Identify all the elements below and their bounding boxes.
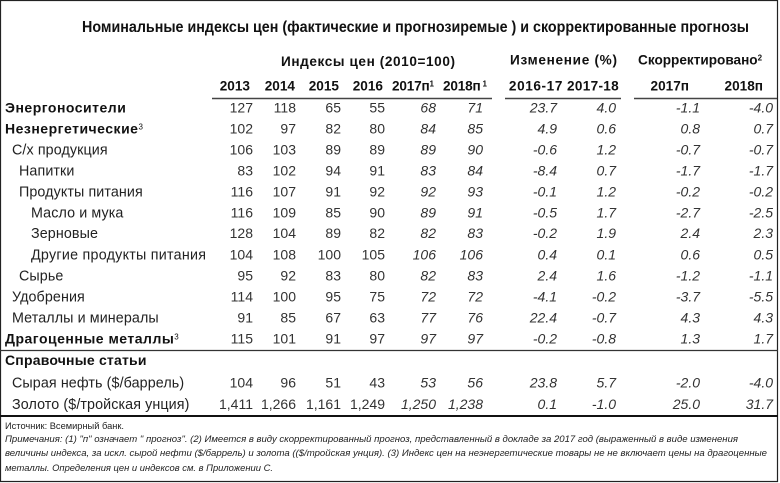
column group headers — [281, 52, 763, 69]
index values 2013-2016: 118 — [274, 99, 296, 115]
forecast and change values: 68 — [420, 99, 436, 115]
column year headers: 2017п — [392, 78, 429, 93]
forecast and change values: -2.0 — [676, 374, 700, 390]
column year headers: 2018п — [443, 78, 480, 93]
forecast and change values: 1.7 — [597, 204, 617, 220]
forecast and change values — [401, 99, 774, 412]
index values 2013-2016: 104 — [230, 246, 253, 262]
row labels — [5, 99, 206, 413]
forecast and change values: 71 — [467, 99, 483, 115]
forecast and change values: 4.0 — [597, 99, 616, 115]
index values 2013-2016: 91 — [237, 309, 253, 325]
forecast and change values: -0.7 — [592, 309, 617, 325]
row labels: Золото ($/тройская унция) — [12, 397, 189, 413]
column year headers: 2016 — [353, 78, 383, 93]
index values 2013-2016: 82 — [325, 120, 341, 136]
index values 2013-2016: 89 — [369, 141, 385, 157]
column year headers: 2014 — [265, 78, 295, 93]
forecast and change values: 0.1 — [597, 246, 616, 262]
forecast and change values: 2.3 — [753, 225, 773, 241]
column year headers: 1 — [480, 79, 487, 88]
forecast and change values: -0.5 — [533, 204, 557, 220]
footnotes — [5, 421, 767, 473]
index values 2013-2016: 97 — [280, 120, 296, 136]
index values 2013-2016: 1,266 — [261, 396, 296, 412]
index values 2013-2016: 89 — [325, 225, 341, 241]
index values 2013-2016: 83 — [325, 267, 341, 283]
row labels: Напитки — [19, 163, 74, 179]
column year headers: 1 — [429, 79, 434, 88]
forecast and change values: 91 — [467, 204, 483, 220]
row labels: Металлы и минералы — [12, 310, 159, 326]
column group headers: Индексы цен (2010=100) — [281, 54, 455, 69]
row labels: Драгоценные металлы — [5, 330, 174, 346]
row labels: Энергоносители — [5, 99, 126, 115]
column year headers: 2018п — [725, 78, 763, 93]
index values 2013-2016: 1,249 — [350, 396, 385, 412]
column year headers: 2017п — [651, 78, 689, 93]
index values 2013-2016: 116 — [231, 204, 253, 220]
forecast and change values: 0.8 — [681, 120, 700, 136]
index values 2013-2016: 102 — [230, 120, 253, 136]
row labels: 3 — [138, 122, 143, 131]
forecast and change values: 1,238 — [448, 396, 483, 412]
forecast and change values: 1.9 — [597, 225, 616, 241]
index values 2013-2016: 92 — [280, 267, 296, 283]
header rules — [212, 98, 777, 100]
index values 2013-2016: 104 — [273, 225, 296, 241]
index values 2013-2016: 91 — [325, 183, 341, 199]
forecast and change values: 82 — [420, 225, 436, 241]
column group headers: Скорректировано — [638, 52, 758, 68]
forecast and change values: 89 — [420, 141, 436, 157]
forecast and change values: 5.7 — [597, 374, 617, 390]
forecast and change values: 106 — [413, 246, 436, 262]
forecast and change values: 4.9 — [538, 120, 557, 136]
index values 2013-2016: 116 — [231, 183, 253, 199]
forecast and change values: 22.4 — [529, 309, 557, 325]
column group headers: 2 — [758, 54, 763, 62]
index values 2013-2016: 106 — [230, 141, 253, 157]
forecast and change values: -0.2 — [533, 330, 557, 346]
index values 2013-2016: 100 — [318, 246, 341, 262]
row labels: Зерновые — [31, 226, 98, 242]
forecast and change values: 77 — [420, 309, 437, 325]
forecast and change values: 1,250 — [401, 396, 436, 412]
forecast and change values: 4.3 — [681, 309, 700, 325]
index values 2013-2016: 65 — [325, 99, 341, 115]
row labels: Масло и мука — [31, 205, 123, 221]
forecast and change values: 90 — [467, 141, 483, 157]
row labels: Справочные статьи — [5, 352, 147, 368]
index values 2013-2016: 85 — [280, 309, 296, 325]
forecast and change values: 2.4 — [537, 267, 557, 283]
forecast and change values: 83 — [420, 162, 436, 178]
index values 2013-2016: 114 — [231, 288, 253, 304]
index values 2013-2016: 95 — [325, 288, 341, 304]
forecast and change values: -1.0 — [592, 396, 616, 412]
index values 2013-2016: 63 — [369, 309, 385, 325]
forecast and change values: -4.1 — [533, 288, 557, 304]
index values 2013-2016: 128 — [230, 225, 253, 241]
forecast and change values: 85 — [467, 120, 483, 136]
forecast and change values: -0.1 — [533, 183, 557, 199]
footnotes: металлы. Определения цен и индексов см. в Приложении С. — [5, 463, 273, 473]
forecast and change values: 92 — [420, 183, 436, 199]
forecast and change values: 1.3 — [681, 330, 700, 346]
forecast and change values: -1.1 — [676, 99, 700, 115]
index values 2013-2016: 103 — [273, 141, 296, 157]
index values 2013-2016: 82 — [369, 225, 385, 241]
index values 2013-2016: 108 — [273, 246, 296, 262]
index values 2013-2016: 80 — [369, 267, 385, 283]
footnotes: Примечания: (1) "п" означает " прогноз". (2) Имеется в виду скорректированный прогноз, представленный в докладе за 2017 год (выраженный в виде изменения — [5, 434, 738, 444]
index values 2013-2016: 1,411 — [219, 396, 253, 412]
index values 2013-2016: 51 — [325, 374, 341, 390]
index values 2013-2016: 101 — [273, 330, 296, 346]
forecast and change values: 1.2 — [597, 183, 616, 199]
forecast and change values: -0.7 — [676, 141, 701, 157]
forecast and change values: -2.7 — [676, 204, 701, 220]
column year headers: 2016-17 — [509, 78, 563, 93]
forecast and change values: -1.7 — [676, 162, 701, 178]
row labels: 3 — [174, 332, 179, 341]
forecast and change values: -4.0 — [749, 374, 773, 390]
forecast and change values: 53 — [420, 374, 436, 390]
forecast and change values: 83 — [467, 267, 483, 283]
forecast and change values: 0.5 — [754, 246, 773, 262]
forecast and change values: 4.3 — [754, 309, 773, 325]
forecast and change values: -0.8 — [592, 330, 616, 346]
index values 2013-2016: 85 — [325, 204, 341, 220]
row labels: Другие продукты питания — [31, 247, 206, 263]
forecast and change values: 56 — [467, 374, 483, 390]
forecast and change values: -3.7 — [676, 288, 701, 304]
forecast and change values: 97 — [467, 330, 484, 346]
forecast and change values: -5.5 — [749, 288, 773, 304]
row labels: Сырье — [19, 268, 63, 284]
forecast and change values: 1.6 — [597, 267, 616, 283]
index values 2013-2016: 94 — [325, 162, 341, 178]
index values 2013-2016: 1,161 — [306, 396, 341, 412]
forecast and change values: 93 — [467, 183, 483, 199]
index values 2013-2016: 127 — [230, 99, 253, 115]
forecast and change values: 2.4 — [680, 225, 700, 241]
index values 2013-2016: 107 — [273, 183, 296, 199]
forecast and change values: 97 — [420, 330, 437, 346]
forecast and change values: 0.4 — [538, 246, 557, 262]
index values 2013-2016: 100 — [273, 288, 296, 304]
index values 2013-2016: 67 — [325, 309, 341, 325]
row labels: Удобрения — [12, 289, 85, 305]
forecast and change values: 23.7 — [529, 99, 558, 115]
forecast and change values: -0.2 — [749, 183, 773, 199]
index values 2013-2016: 80 — [369, 120, 385, 136]
forecast and change values: 0.6 — [681, 246, 700, 262]
row labels: Незнергетические — [5, 120, 138, 136]
forecast and change values: -2.5 — [749, 204, 773, 220]
index values 2013-2016: 109 — [273, 204, 296, 220]
forecast and change values: -4.0 — [749, 99, 773, 115]
index values 2013-2016: 97 — [369, 330, 385, 346]
forecast and change values: -0.2 — [592, 288, 616, 304]
row labels: Продукты питания — [19, 184, 143, 200]
forecast and change values: -0.2 — [533, 225, 557, 241]
index values 2013-2016: 105 — [362, 246, 385, 262]
forecast and change values: 84 — [467, 162, 483, 178]
index values 2013-2016 — [219, 99, 385, 412]
index values 2013-2016: 89 — [325, 141, 341, 157]
forecast and change values: 82 — [420, 267, 436, 283]
forecast and change values: 25.0 — [672, 396, 700, 412]
footnotes: величины индекса, за искл. сырой нефти ($/баррель) и золота (($/тройская унция). (3) Индекс цен на неэнергетические товары не не включает цены на драгоценные — [5, 448, 767, 458]
index values 2013-2016: 96 — [280, 374, 296, 390]
footnotes: Источник: Всемирный банк. — [5, 421, 124, 431]
index values 2013-2016: 90 — [369, 204, 385, 220]
forecast and change values: 76 — [467, 309, 483, 325]
forecast and change values: -1.7 — [749, 162, 774, 178]
column year headers: 2013 — [220, 78, 250, 93]
index values 2013-2016: 83 — [237, 162, 253, 178]
row labels: Сырая нефть ($/баррель) — [12, 375, 184, 391]
column year headers — [220, 78, 763, 93]
forecast and change values: -1.1 — [749, 267, 773, 283]
forecast and change values: -1.2 — [676, 267, 700, 283]
column year headers: 2017-18 — [567, 78, 619, 93]
forecast and change values: -0.2 — [676, 183, 700, 199]
row labels: С/х продукция — [12, 142, 108, 158]
forecast and change values: 0.1 — [538, 396, 557, 412]
forecast and change values: 89 — [420, 204, 436, 220]
index values 2013-2016: 91 — [369, 162, 385, 178]
index values 2013-2016: 55 — [369, 99, 385, 115]
column year headers: 2015 — [309, 78, 339, 93]
index values 2013-2016: 92 — [369, 183, 385, 199]
index values 2013-2016: 115 — [231, 330, 253, 346]
index values 2013-2016: 43 — [369, 374, 385, 390]
column group headers: Изменение (%) — [510, 52, 617, 68]
forecast and change values: -8.4 — [533, 162, 557, 178]
forecast and change values: -0.6 — [533, 141, 557, 157]
forecast and change values: 0.7 — [597, 162, 617, 178]
index values 2013-2016: 75 — [369, 288, 385, 304]
forecast and change values: 83 — [467, 225, 483, 241]
forecast and change values: 31.7 — [746, 396, 774, 412]
forecast and change values: 72 — [467, 288, 483, 304]
forecast and change values: 84 — [420, 120, 436, 136]
index values 2013-2016: 102 — [273, 162, 296, 178]
forecast and change values: 1.2 — [597, 141, 616, 157]
forecast and change values: 0.7 — [754, 120, 774, 136]
forecast and change values: -0.7 — [749, 141, 774, 157]
index values 2013-2016: 104 — [230, 374, 253, 390]
index values 2013-2016: 95 — [237, 267, 253, 283]
forecast and change values: 1.7 — [754, 330, 774, 346]
index values 2013-2016: 91 — [325, 330, 341, 346]
forecast and change values: 106 — [460, 246, 483, 262]
forecast and change values: 23.8 — [529, 374, 557, 390]
forecast and change values: 72 — [420, 288, 436, 304]
forecast and change values: 0.6 — [597, 120, 616, 136]
